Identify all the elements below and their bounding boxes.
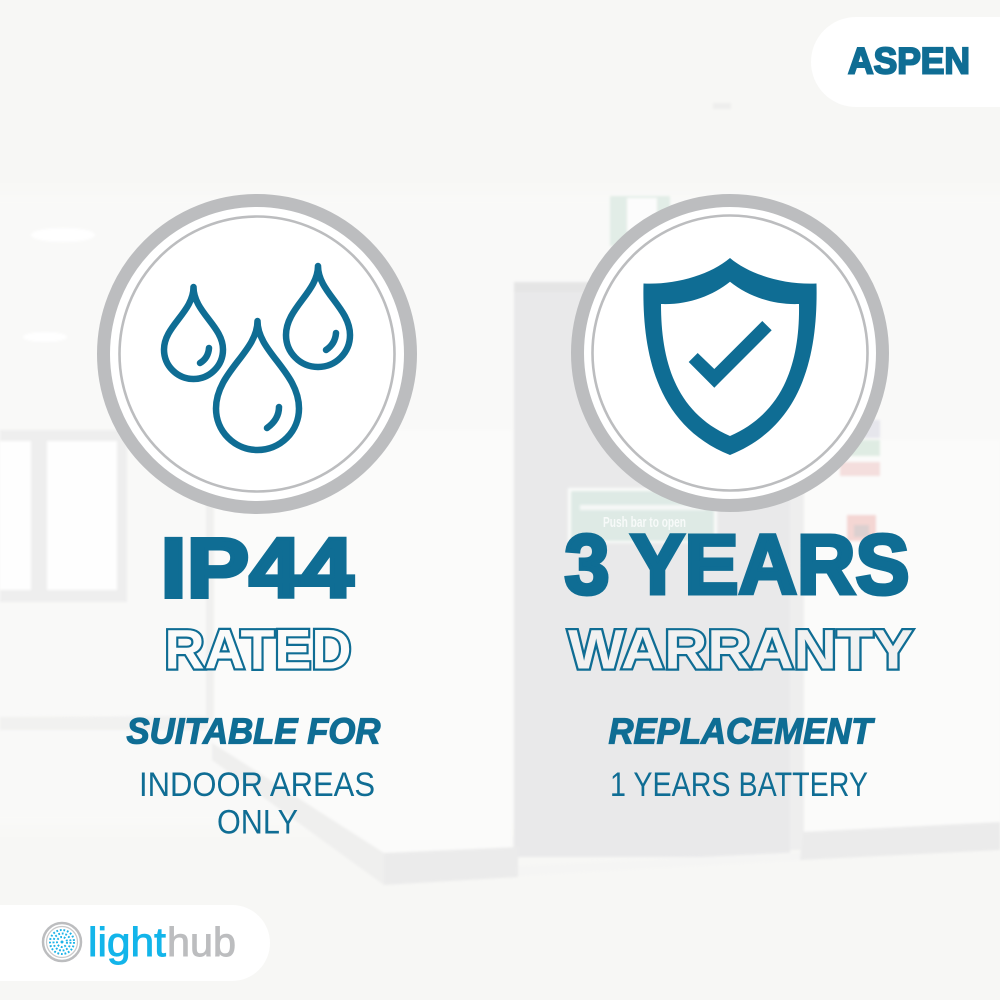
logo: lighthub: [0, 905, 270, 981]
icon: logo rings and dots: [43, 923, 81, 961]
text: indoor areas only: [139, 766, 375, 842]
subheading: RATED outline: RATED: [164, 618, 352, 680]
icon: water drops in ring: [104, 200, 410, 508]
background: faded corridor photo: Push bar to open: [603, 515, 686, 531]
badge: ASPEN: [811, 17, 1000, 107]
text: indoor areas only: INDOOR AREAS: [139, 766, 375, 804]
heading: IP44: IP44: [160, 521, 354, 615]
text: 1 years battery: 1 YEARS BATTERY: [610, 766, 868, 804]
logo: lighthub: hub: [167, 919, 236, 965]
heading: 3 YEARS: 3 YEARS: [564, 518, 910, 612]
label: suitable for: SUITABLE FOR: [126, 710, 380, 752]
icon: shield with check in ring: [578, 200, 882, 506]
text: indoor areas only: ONLY: [217, 804, 298, 842]
wordmark: light: [88, 919, 167, 965]
label: replacement: REPLACEMENT: [608, 710, 875, 752]
subheading: WARRANTY outline: WARRANTY: [568, 618, 913, 680]
panel: warranty: [564, 200, 913, 804]
badge: ASPEN: ASPEN: [848, 40, 970, 82]
panel: IP44 rating: [104, 200, 410, 842]
